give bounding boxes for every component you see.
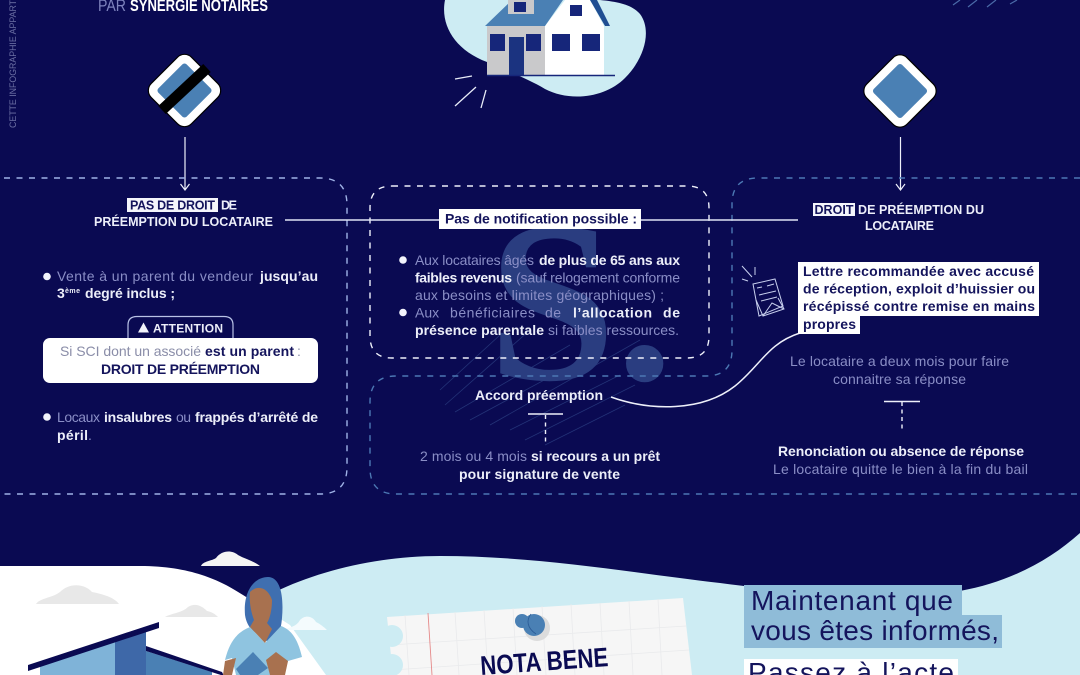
- icon: priority road sign: [860, 51, 940, 131]
- icon: no priority road sign: [144, 50, 225, 131]
- centre list: de: [545, 304, 561, 320]
- text: waiver or no reply: [773, 443, 1028, 477]
- arrow: left sign to left panel: [180, 137, 190, 190]
- left list item 1: ème: [65, 288, 80, 295]
- text: waiver or no reply: Renonciation ou absence de réponse: [778, 443, 1024, 459]
- text: delays: [420, 448, 660, 482]
- door: [509, 37, 524, 76]
- text: two months: connaitre sa réponse: [833, 371, 966, 387]
- panel: no preemption (left dashed outline): [4, 178, 347, 494]
- tee connector centre: [528, 414, 563, 443]
- callout: attention: DROIT DE PRÉEMPTION: [101, 361, 260, 377]
- arrow: right sign to right panel: [896, 137, 905, 190]
- callout: attention: ATTENTION: [153, 322, 223, 336]
- highlighted text: registered letter: [798, 262, 1039, 334]
- illustration: house: [444, 0, 646, 108]
- heading: right of preemption: DE PRÉEMPTION DU: [858, 202, 984, 217]
- shirt: [225, 626, 302, 675]
- bottom background: white hill: [0, 566, 326, 675]
- watermark: S. with hatching: S.: [488, 174, 673, 429]
- cloud: grey centre: [165, 605, 218, 617]
- cloud: grey left: [36, 585, 119, 604]
- panel: no notification possible (white dashed outline): [370, 186, 709, 358]
- left list item 2: péril: [57, 427, 88, 443]
- callout: attention: [43, 316, 318, 383]
- roof: [485, 0, 563, 26]
- left list item 2: ou: [176, 409, 191, 425]
- highlighted text: registered letter: Lettre recommandée avec accusé: [803, 263, 1034, 279]
- holes: [381, 625, 403, 647]
- left list item 1: Vente à un parent du vendeur: [57, 268, 253, 284]
- left list item 1: degré inclus ;: [85, 285, 175, 301]
- illustration: modern house: [28, 622, 224, 675]
- centre list: faibles revenus: [415, 270, 512, 286]
- centre list: aux besoins et limites géographiques) ;: [415, 287, 664, 303]
- connector: accord to letter: [611, 333, 800, 407]
- connector line across panels: [285, 219, 798, 221]
- highlighted text: registered letter: de réception, exploit d’huissier ou: [803, 280, 1035, 296]
- heading: no preemption right: PRÉEMPTION DU LOCATAIRE: [94, 214, 273, 229]
- centre list: si faibles ressources.: [548, 322, 679, 338]
- heading: no preemption right: [94, 198, 273, 229]
- panel: preemption and acceptance (blue dashed outline): [370, 178, 1080, 494]
- note paper: [381, 598, 692, 675]
- centre list: de: [663, 304, 680, 320]
- centre list: [399, 252, 680, 338]
- heading: right of preemption: DROIT: [814, 203, 854, 217]
- callout: attention: Si SCI dont un associé: [60, 343, 201, 359]
- hair: [245, 577, 282, 645]
- sparks: [455, 76, 486, 108]
- blob: [444, 0, 646, 97]
- margin: [428, 613, 432, 675]
- dormer: [508, 0, 534, 14]
- heading: no preemption right: PAS DE DROIT: [130, 198, 215, 212]
- call to action: vous êtes informés,: [751, 615, 999, 646]
- left list item 2: [43, 409, 318, 443]
- cloud: white on blue: [283, 617, 327, 630]
- text: delays: si recours a un prêt: [531, 448, 660, 464]
- centre list: l’allocation: [573, 304, 652, 320]
- centre list: de plus de 65 ans aux: [539, 252, 680, 268]
- face and neck: [250, 588, 272, 643]
- callout: attention: est un parent: [205, 343, 294, 359]
- text: delays: 2 mois ou 4 mois: [420, 448, 527, 464]
- heading: right of preemption: [813, 202, 984, 233]
- tablet: [236, 652, 268, 675]
- vertical credit text: CETTE INFOGRAPHIE APPART: [8, 0, 18, 128]
- left list item 2: Locaux: [57, 409, 100, 425]
- tee connector right: [884, 402, 920, 429]
- text: delays: pour signature de vente: [459, 466, 620, 482]
- heading: no notification possible: Pas de notification possible :: [445, 210, 637, 226]
- left list item 2: frappés d’arrêté de: [195, 409, 318, 425]
- call to action: Maintenant que: [751, 585, 953, 616]
- bottom background: light blue wave: [275, 533, 1080, 675]
- grid: [390, 599, 689, 675]
- left list item 1: jusqu’au: [259, 268, 318, 284]
- walls: [487, 26, 545, 76]
- centre list: présence parentale: [415, 322, 544, 338]
- arms: [223, 652, 288, 675]
- left list item 1: [43, 268, 318, 301]
- text: two months: [790, 353, 1009, 387]
- pin: [524, 615, 550, 641]
- heading: right of preemption: LOCATAIRE: [865, 219, 934, 233]
- centre list: (sauf relogement conforme: [516, 270, 680, 286]
- text: two months: Le locataire a deux mois pour faire: [790, 353, 1009, 369]
- highlighted text: registered letter: récépissé contre remise en mains: [803, 298, 1035, 314]
- centre list: Aux: [415, 304, 439, 320]
- title: par Synergie Notaires: [98, 0, 268, 15]
- decorative hatch top right: [953, 0, 1017, 7]
- centre list: Aux locataires âgés: [415, 252, 534, 268]
- windows: [490, 34, 505, 51]
- left list item 1: 3: [57, 285, 65, 301]
- left list item 2: insalubres: [104, 409, 172, 425]
- callout: attention: :: [297, 343, 301, 359]
- icon: envelope letter: [742, 266, 784, 316]
- centre list: bénéficiaires: [450, 304, 535, 320]
- text: accord preemption: Accord préemption: [475, 387, 603, 403]
- text: waiver or no reply: Le locataire quitte le bien à la fin du bail: [773, 461, 1028, 477]
- left list item 2: .: [88, 427, 92, 443]
- cloud: white on navy: [201, 552, 260, 566]
- illustration: woman with keys: [223, 577, 302, 675]
- call to action: [744, 585, 1002, 675]
- highlighted text: registered letter: propres: [803, 316, 856, 332]
- heading: no preemption right: DE: [221, 198, 237, 212]
- icon: warning: [138, 322, 149, 332]
